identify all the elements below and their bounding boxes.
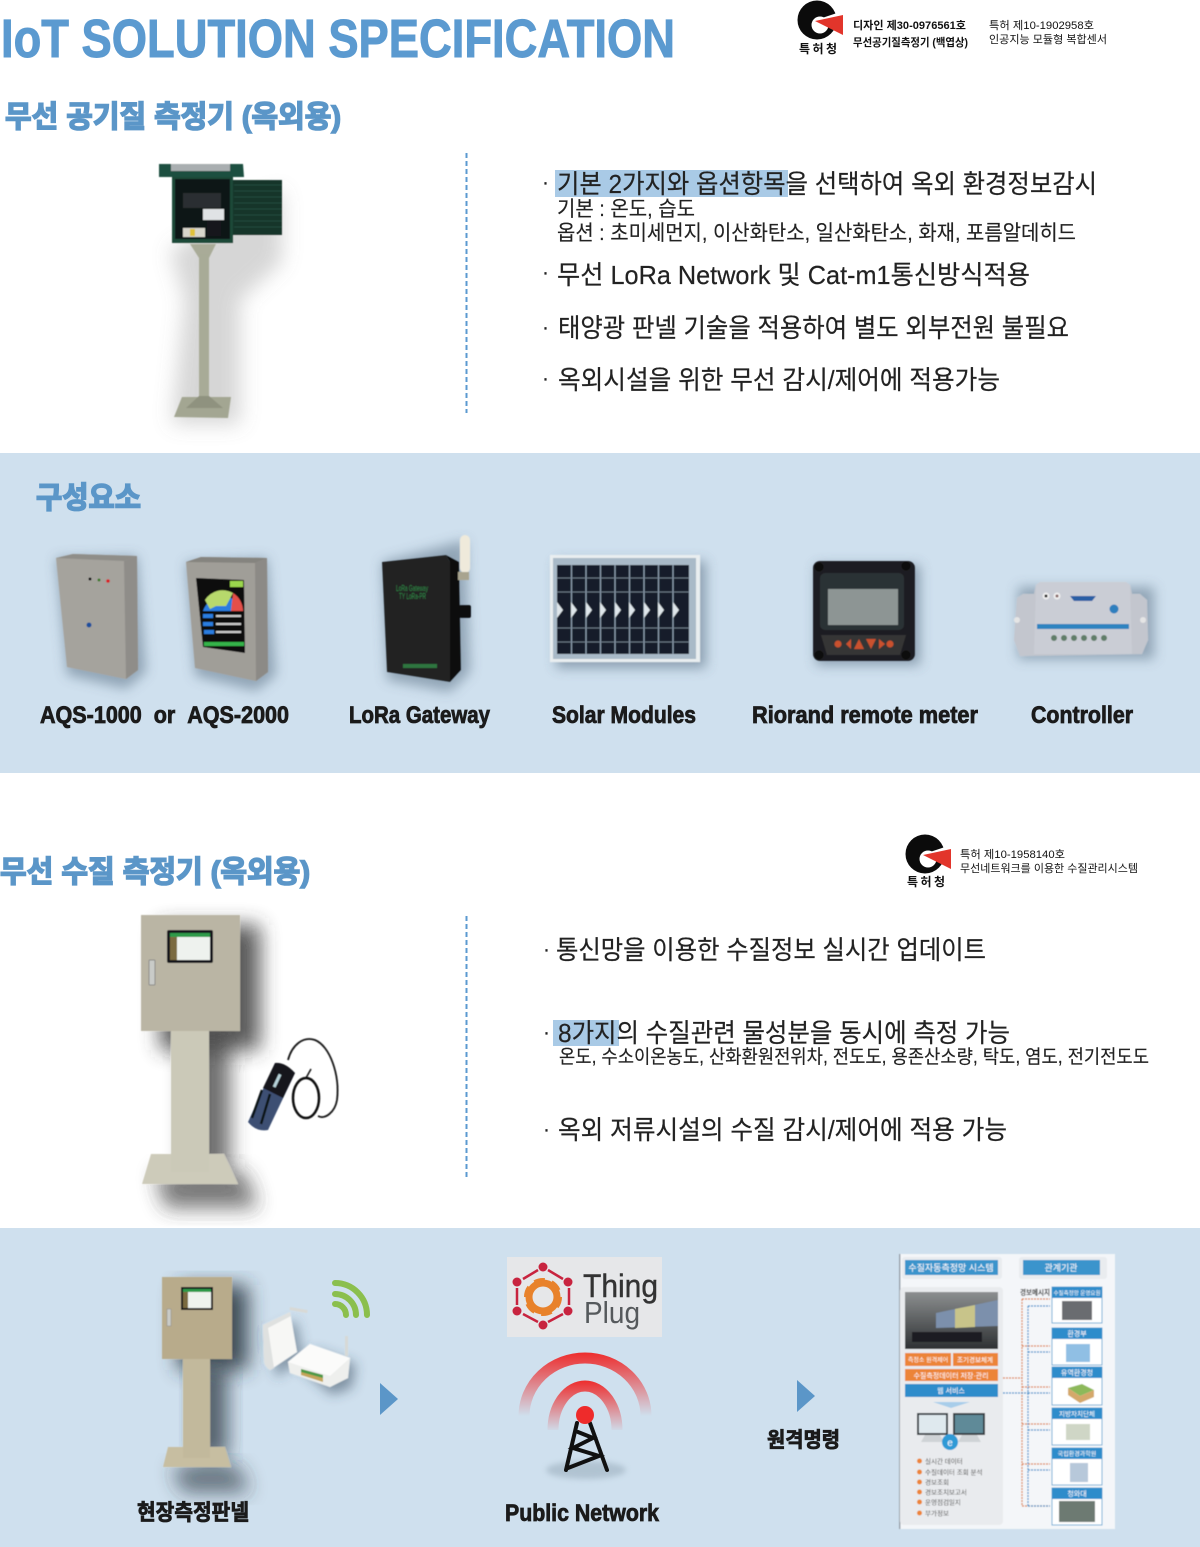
icon: wifi signal bbox=[335, 1283, 367, 1315]
card: presidential office bbox=[1052, 1488, 1102, 1525]
card: environmental research institute bbox=[1052, 1448, 1102, 1485]
device: LoRa gateway: LoRa Gateway bbox=[396, 584, 428, 593]
icon: monitors and globe: e bbox=[947, 1438, 953, 1449]
feature 1 bbox=[542, 169, 1097, 245]
patent text bbox=[960, 848, 1138, 875]
header: related agencies: 관계기관 bbox=[1044, 1262, 1078, 1273]
buttons: functions: 수질측정데이터 저장·관리 bbox=[913, 1371, 989, 1380]
device: LoRa gateway: TY LoRa-PR bbox=[399, 592, 426, 601]
label: solar modules: Solar Modules bbox=[552, 702, 696, 729]
photo: control room bbox=[905, 1292, 998, 1349]
label: public network: Public Network bbox=[505, 1500, 660, 1527]
icon: patent office logo: 특허청 bbox=[799, 41, 837, 56]
divider: water section bbox=[466, 916, 468, 1177]
feature 1: 기본 2가지와 옵션항목을 선택하여 옥외 환경정보감시 bbox=[557, 169, 1097, 199]
device: solar module bbox=[550, 555, 706, 668]
list: web services: 부가정보 bbox=[925, 1508, 949, 1518]
sensor patent text: 인공지능 모듈형 복합센서 bbox=[989, 33, 1107, 46]
card: presidential office: 청와대 bbox=[1067, 1489, 1087, 1498]
patent text: 특허 제10-1958140호 bbox=[960, 848, 1065, 861]
list: web services: 경보조치보고서 bbox=[925, 1488, 967, 1496]
logo: ThingPlug: Plug bbox=[584, 1295, 640, 1330]
patent badges: air sensor bbox=[798, 0, 1107, 56]
label: remote command: 원격명령 bbox=[767, 1429, 840, 1452]
feature 1: · bbox=[543, 938, 550, 961]
device: controller bbox=[1014, 582, 1154, 659]
label: remote meter: Riorand remote meter bbox=[752, 702, 978, 729]
feature 1: 통신망을 이용한 수질정보 실시간 업데이트 bbox=[556, 935, 986, 965]
panel: components bbox=[0, 453, 1200, 773]
heading: wireless air quality meter: 무선 공기질 측정기 (옥외용) bbox=[5, 101, 341, 134]
label: on-site panel: 현장측정판넬 bbox=[137, 1500, 249, 1525]
photo: on-site panel with gateway bbox=[162, 1277, 356, 1492]
patent text: 무선네트워크를 이용한 수질관리시스템 bbox=[960, 862, 1138, 875]
icon: patent office logo: 특허청 bbox=[907, 874, 945, 889]
device: LoRa gateway bbox=[382, 535, 471, 692]
card: operations staff bbox=[1052, 1287, 1102, 1323]
panel: system flow bbox=[0, 1228, 1200, 1547]
list: web services: 수질데이터 조회 분석 bbox=[925, 1468, 982, 1476]
label: alert message: 경보메시지 bbox=[1020, 1287, 1050, 1297]
diagram: water monitoring network bbox=[899, 1254, 1115, 1529]
feature 2: · bbox=[543, 1021, 550, 1044]
logo: ThingPlug bbox=[507, 1257, 662, 1337]
feature 3: · bbox=[543, 1118, 550, 1141]
sensor patent text bbox=[989, 19, 1107, 46]
feature 1: 기본 : 온도, 습도 bbox=[557, 198, 695, 221]
feature 2: 온도, 수소이온농도, 산화환원전위차, 전도도, 용존산소량, 탁도, 염도, 전기전도도 bbox=[559, 1046, 1149, 1068]
highlight bbox=[553, 1020, 619, 1046]
device: remote meter bbox=[813, 561, 920, 665]
design patent text: 디자인 제30-0976561호 bbox=[853, 18, 966, 32]
card: watershed office bbox=[1052, 1367, 1102, 1405]
arrow bbox=[380, 1383, 398, 1415]
feature 2 bbox=[543, 1018, 1149, 1068]
header: monitoring system bbox=[905, 1260, 998, 1275]
card: local governments bbox=[1052, 1408, 1102, 1445]
feature 1: · bbox=[542, 171, 549, 194]
header: related agencies bbox=[1023, 1260, 1100, 1275]
photo: water quality station and probe bbox=[141, 915, 338, 1208]
list: web services: 운영점검일지 bbox=[925, 1498, 961, 1506]
logo: ThingPlug: Thing bbox=[583, 1268, 658, 1304]
icon: patent office logo bbox=[798, 0, 843, 56]
feature 2: 8가지의 수질관련 물성분을 동시에 측정 가능 bbox=[558, 1018, 1010, 1048]
divider: air section bbox=[466, 153, 468, 413]
label: LoRa gateway: LoRa Gateway bbox=[349, 702, 491, 729]
feature 1: 옵션 : 초미세먼지, 이산화탄소, 일산화탄소, 화재, 포름알데히드 bbox=[557, 222, 1076, 245]
card: operations staff: 수질측정망 운영요원 bbox=[1053, 1289, 1101, 1297]
icon: patent office logo bbox=[906, 834, 951, 889]
feature 3: 옥외 저류시설의 수질 감시/제어에 적용 가능 bbox=[558, 1115, 1007, 1145]
device: AQS-2000 bbox=[186, 557, 276, 691]
sensor patent text: 특허 제10-1902958호 bbox=[989, 19, 1094, 32]
feature 4: 옥외시설을 위한 무선 감시/제어에 적용가능 bbox=[558, 365, 1000, 395]
buttons: functions: 측정소 원격제어 bbox=[908, 1356, 948, 1364]
card: watershed office: 유역환경청 bbox=[1061, 1368, 1093, 1377]
text block: water quality features bbox=[543, 935, 1149, 1145]
title: IoT SOLUTION SPECIFICATION bbox=[1, 9, 675, 69]
buttons: functions: 조기경보체계 bbox=[957, 1355, 993, 1364]
device: AQS-1000 bbox=[56, 554, 146, 689]
list: web services bbox=[917, 1456, 982, 1518]
label: controller: Controller bbox=[1031, 702, 1133, 729]
design patent text bbox=[853, 18, 968, 49]
buttons: functions: 웹 서비스 bbox=[937, 1386, 965, 1395]
card: ministry of environment: 환경부 bbox=[1067, 1329, 1087, 1338]
heading: wireless water quality meter: 무선 수질 측정기 (옥외용) bbox=[0, 856, 310, 889]
feature 3: · bbox=[542, 316, 549, 339]
patent badge: water system bbox=[906, 834, 1138, 889]
card: ministry of environment bbox=[1052, 1328, 1102, 1365]
list: web services: 실시간 데이터 bbox=[925, 1456, 963, 1466]
feature 3: 태양광 판넬 기술을 적용하여 별도 외부전원 불필요 bbox=[558, 313, 1069, 343]
icon: monitors and globe bbox=[917, 1402, 985, 1450]
header: monitoring system: 수질자동측정망 시스템 bbox=[908, 1262, 994, 1273]
heading: components: 구성요소 bbox=[36, 482, 141, 515]
list: web services: 경보조회 bbox=[925, 1478, 949, 1486]
text block: air quality features bbox=[542, 169, 1097, 395]
buttons: functions bbox=[905, 1353, 998, 1397]
feature 4: · bbox=[542, 367, 549, 390]
highlight bbox=[555, 170, 788, 197]
card: environmental research institute: 국립환경과학원 bbox=[1058, 1450, 1096, 1458]
feature 2: · bbox=[542, 261, 549, 284]
feature 2: 무선 LoRa Network 및 Cat-m1통신방식적용 bbox=[557, 260, 1030, 290]
arrow bbox=[797, 1380, 815, 1412]
card: local governments: 지방자치단체 bbox=[1059, 1409, 1095, 1418]
design patent text: 무선공기질측정기 (백엽상) bbox=[853, 35, 968, 49]
icon: network tower bbox=[524, 1358, 646, 1479]
connectors bbox=[1003, 1299, 1050, 1506]
photo: outdoor air quality station bbox=[159, 164, 282, 424]
label: AQS models: AQS-1000 or AQS-2000 bbox=[40, 702, 289, 729]
